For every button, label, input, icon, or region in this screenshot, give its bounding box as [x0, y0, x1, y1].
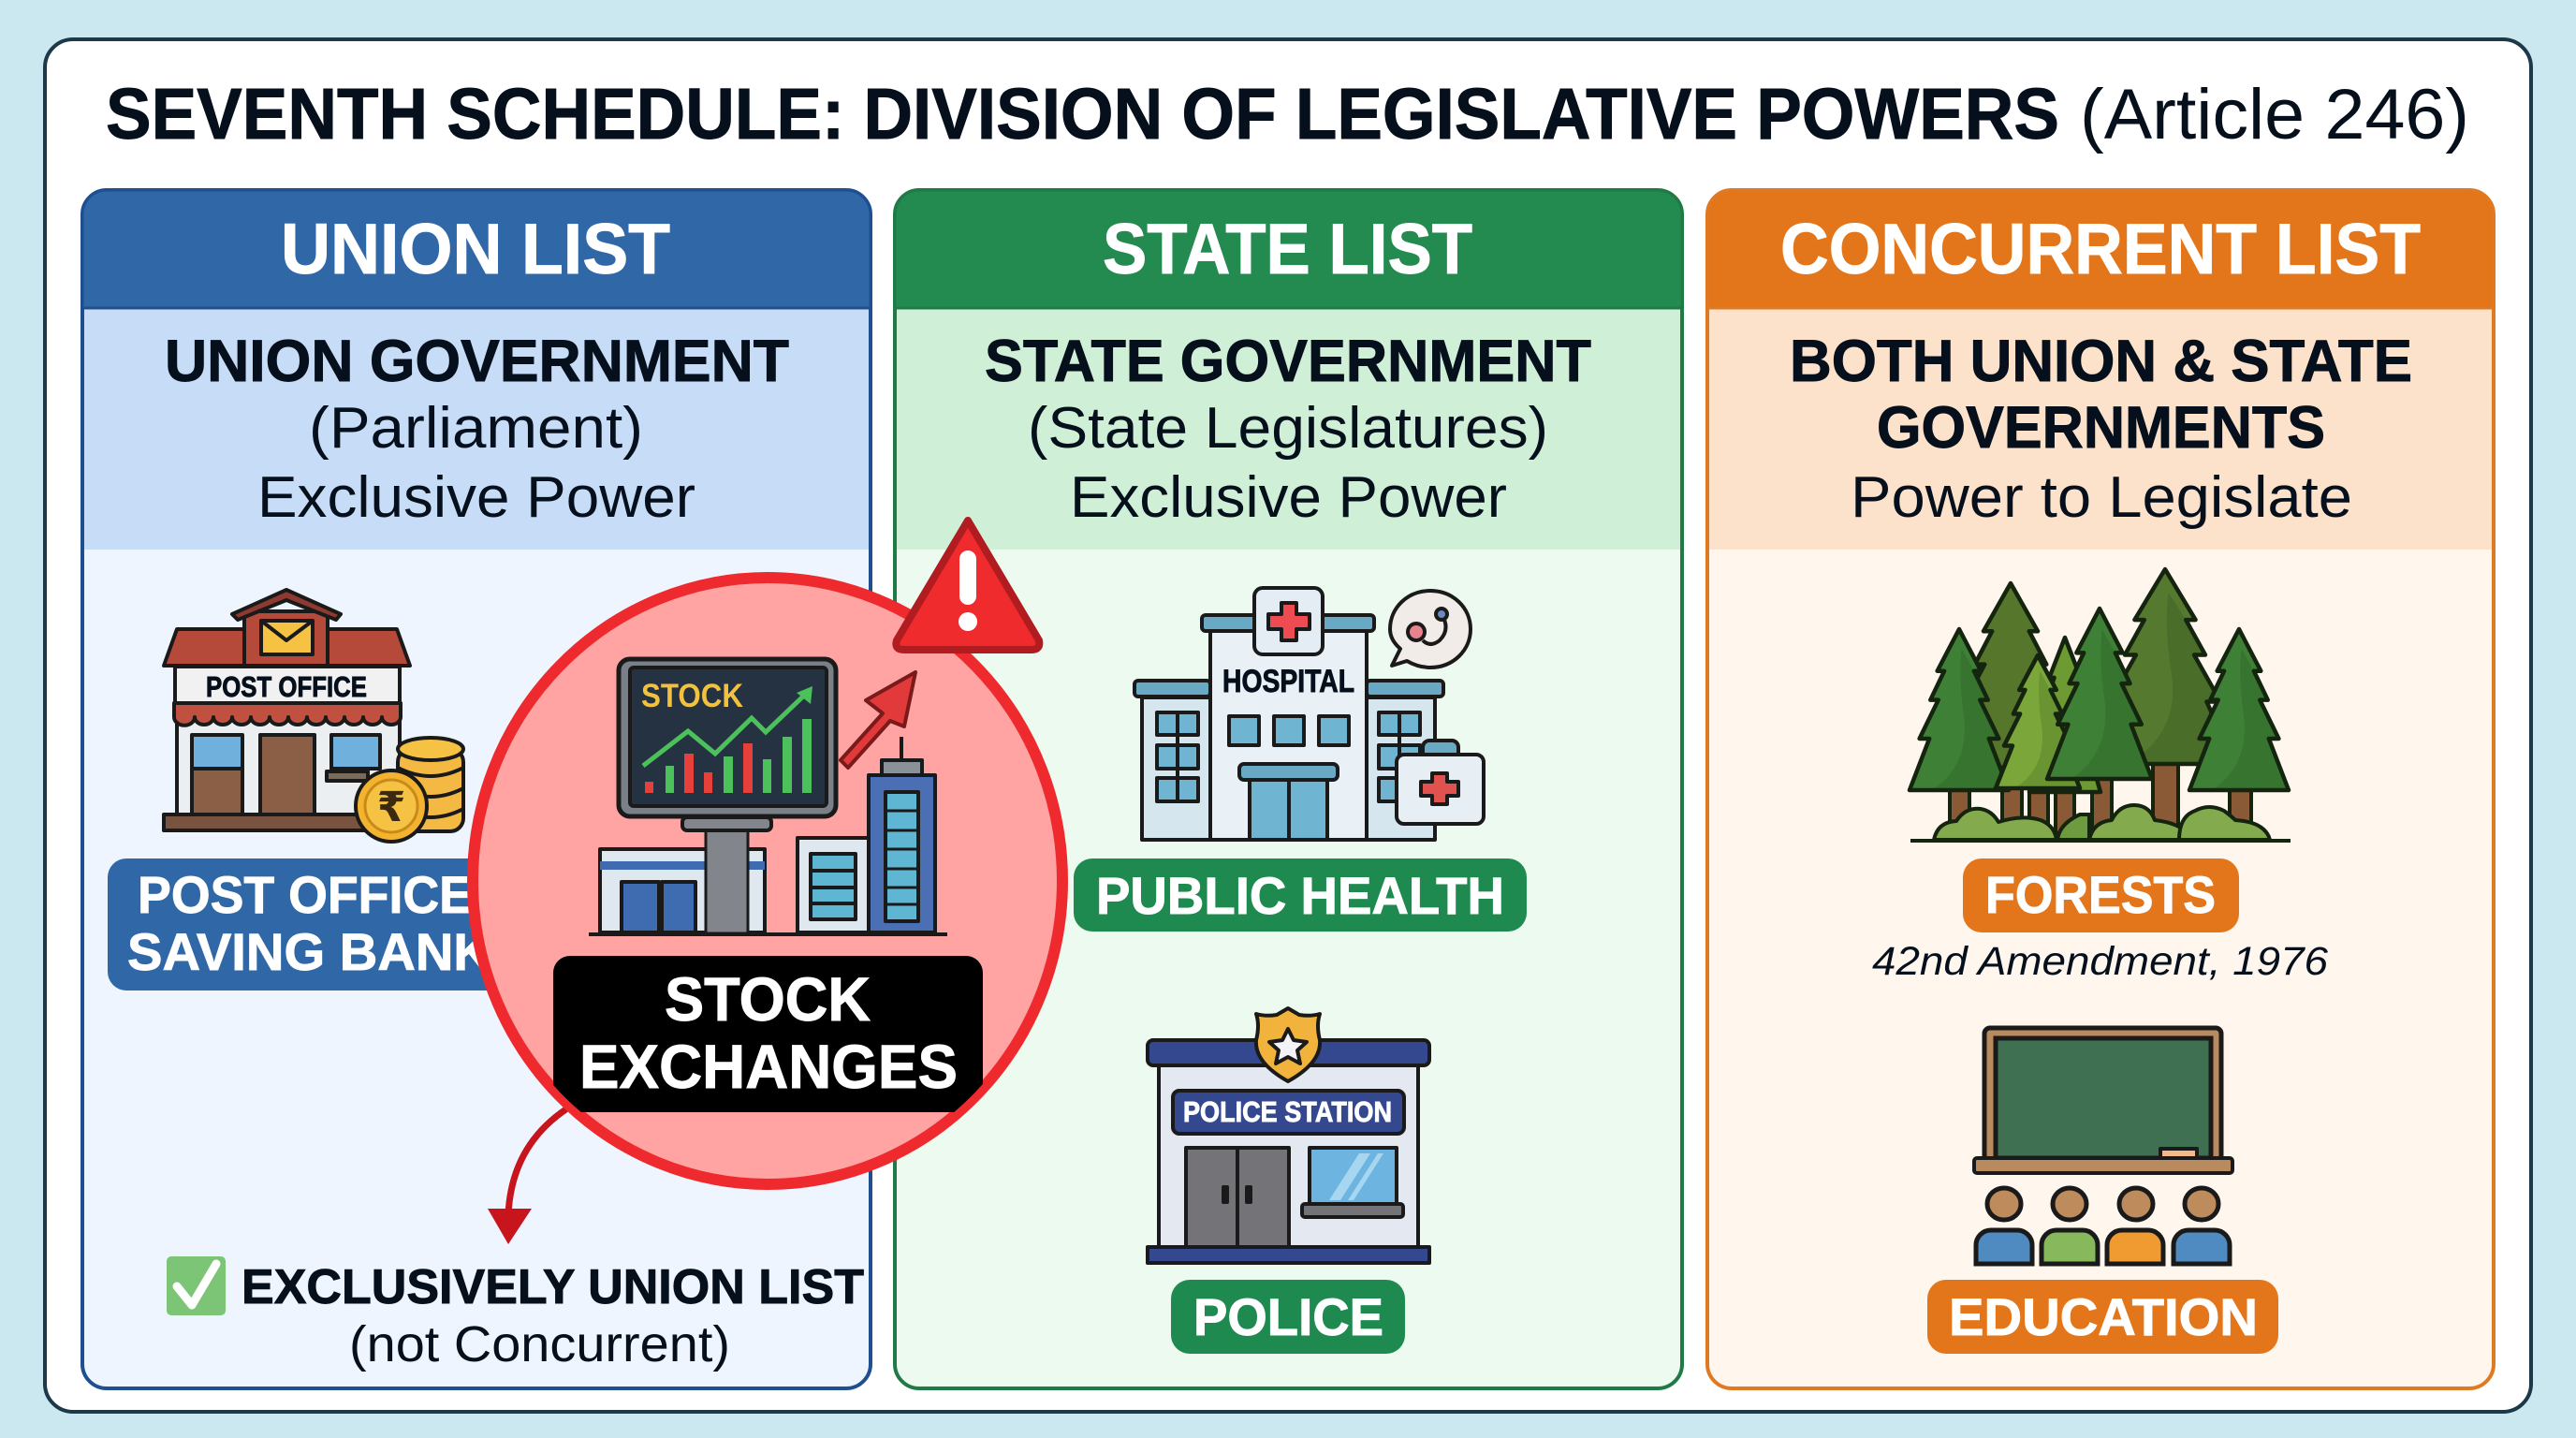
label: education — [1927, 1280, 2278, 1354]
arrow: stock exchanges to exclusively union — [488, 1108, 567, 1244]
state description: Exclusive Power — [1070, 465, 1507, 530]
label: police — [1171, 1280, 1405, 1354]
label: police: POLICE — [1193, 1287, 1383, 1346]
panel: state list — [895, 190, 1682, 1388]
label: public health: PUBLIC HEALTH — [1096, 866, 1504, 925]
state header — [895, 190, 1682, 308]
union description: UNION GOVERNMENT — [165, 329, 789, 394]
icon: stock market: STOCK — [641, 678, 743, 714]
label: stock exchanges: EXCHANGES — [579, 1032, 958, 1101]
icon: check mark — [167, 1256, 226, 1315]
state description: STATE GOVERNMENT — [985, 329, 1591, 394]
note: exclusively union list — [242, 1260, 864, 1372]
state description: (State Legislatures) — [1028, 396, 1548, 461]
title: SEVENTH SCHEDULE: DIVISION OF LEGISLATIVE POWERS — [106, 74, 2059, 154]
union heading: UNION LIST — [281, 210, 670, 289]
icon: forest — [1910, 569, 2291, 843]
label: post office saving bank: POST OFFICE — [138, 865, 473, 924]
union description: (Parliament) — [309, 396, 643, 461]
label: stock exchanges — [553, 956, 983, 1112]
union description — [165, 329, 789, 530]
icon: hospital — [1134, 588, 1484, 840]
note: exclusively union list: (not Concurrent) — [349, 1316, 730, 1372]
icon: police station — [1148, 1008, 1429, 1263]
state subheader band — [897, 308, 1680, 550]
state panel body — [895, 190, 1682, 1388]
label: post office saving bank: SAVING BANK — [127, 922, 491, 981]
icon: warning triangle — [896, 521, 1039, 650]
note: 42nd amendment: 42nd Amendment, 1976 — [1872, 939, 2328, 984]
concurrent panel body — [1707, 190, 2494, 1388]
concurrent subheader band — [1709, 308, 2492, 550]
concurrent heading: CONCURRENT LIST — [1780, 210, 2421, 289]
union panel body — [82, 190, 871, 1388]
concurrent description: BOTH UNION & STATE — [1790, 329, 2412, 394]
state heading: STATE LIST — [1103, 210, 1472, 289]
label: stock exchanges: STOCK — [665, 964, 871, 1034]
icon: hospital: HOSPITAL — [1222, 664, 1354, 699]
callout: stock exchanges circle — [473, 578, 1062, 1184]
icon: stock market — [589, 659, 947, 936]
union description: Exclusive Power — [257, 465, 695, 530]
union header — [82, 190, 871, 308]
label: forests: FORESTS — [1985, 865, 2216, 924]
concurrent header — [1707, 190, 2494, 308]
concurrent description: Power to Legislate — [1851, 465, 2352, 530]
concurrent description: GOVERNMENTS — [1877, 395, 2325, 461]
icon: post office — [164, 590, 463, 842]
note: exclusively union list: EXCLUSIVELY UNION LIST — [242, 1260, 864, 1314]
concurrent description — [1790, 329, 2412, 530]
title: (Article 246) — [2080, 75, 2469, 154]
panel: union list — [82, 190, 871, 1388]
icon: post office: POST OFFICE — [206, 670, 367, 703]
icon: police station: POLICE STATION — [1183, 1095, 1392, 1128]
icon: classroom — [1974, 1028, 2232, 1264]
state description — [985, 329, 1591, 530]
panel: concurrent list — [1707, 190, 2494, 1388]
icon: post office: ₹ — [377, 784, 405, 831]
highlight circle — [473, 578, 1062, 1184]
union subheader band — [84, 308, 869, 550]
label: education: EDUCATION — [1949, 1287, 2258, 1346]
label: post office saving bank — [108, 858, 576, 990]
